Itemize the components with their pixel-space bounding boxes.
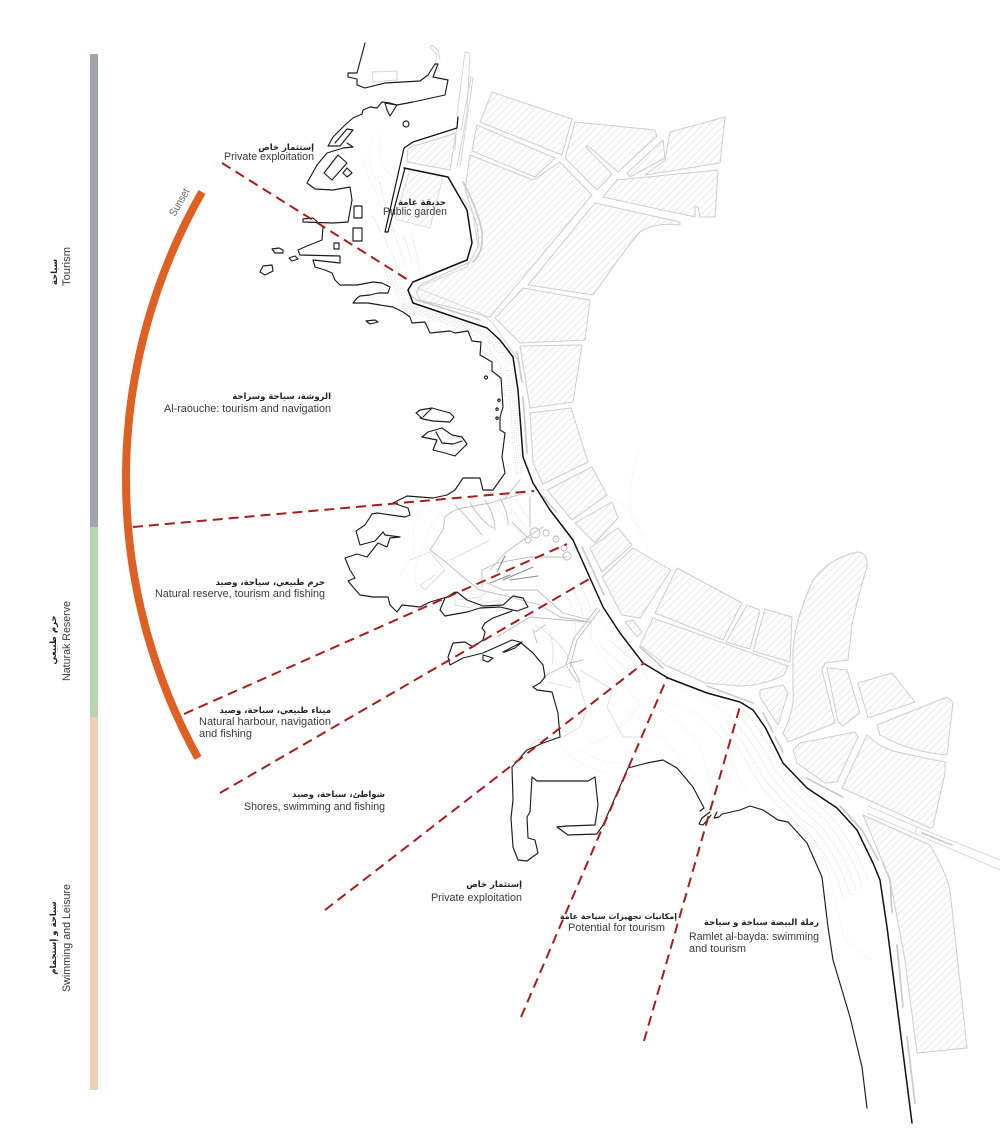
category label: Natural Reserve: [49, 601, 73, 681]
category label: Tourism: [50, 247, 73, 286]
category label: Natural Reserve: Naturak Reserve: [61, 601, 73, 681]
label: private exploitation south: إستثمار خاص: [466, 880, 522, 890]
label: Al-raouche: [164, 392, 331, 415]
label: potential for tourism: Potential for tourism: [568, 922, 665, 934]
Dalieh topographic lines: [410, 480, 640, 762]
dotted shoreline contours: [362, 135, 870, 960]
red dashed dividers: [133, 163, 741, 1041]
label: potential for tourism: [560, 912, 677, 934]
urban parcels: [395, 92, 967, 1053]
label: natural reserve: Natural reserve, tourism and fishing: [155, 588, 325, 600]
left category bar: [90, 54, 98, 1090]
category label: Swimming and Leisure: Swimming and Leisure: [61, 884, 73, 992]
label: Ramlet al-bayda: رملة البيضة سباحة و سياحة: [704, 918, 819, 928]
label: Ramlet al-bayda: Ramlet al-bayda: swimming: [689, 931, 819, 943]
sunset label: Sunset: [167, 187, 193, 218]
label: Ramlet al-bayda: [689, 918, 819, 955]
label: natural reserve: حرم طبيعي، سياحة، وصيد: [216, 578, 325, 588]
category label: Natural Reserve: حرم طبيعي: [49, 616, 59, 664]
label: public garden: [383, 198, 447, 218]
label: potential for tourism: إمكانيات تجهيزات سياحة عامة: [560, 912, 677, 921]
roads and medians: [372, 45, 1000, 1103]
label: private exploitation north: Private exploitation: [224, 151, 314, 163]
label: private exploitation north: [224, 143, 314, 163]
label: natural harbour: ميناء طبيعي، سباحة، وصيد: [219, 706, 331, 716]
label: private exploitation north: إستثمار خاص: [258, 143, 314, 153]
corniche road edge: [385, 117, 912, 1123]
label: shores: شواطئ، سباحة، وصيد: [292, 790, 385, 800]
label: Ramlet al-bayda: and tourism: [689, 943, 746, 955]
label: Al-raouche: Al-raouche: tourism and navigation: [164, 403, 331, 415]
category label: Swimming and Leisure: [49, 884, 73, 992]
label: public garden: Public garden: [383, 206, 447, 218]
label: natural harbour: and fishing: [199, 728, 252, 740]
category label: Tourism: سياحة: [50, 259, 60, 285]
label: Al-raouche: الروشة، سياحة وسراحة: [232, 392, 331, 402]
label: public garden: حديقة عامة: [398, 198, 446, 208]
shoreline: [260, 43, 867, 1108]
label: natural harbour: Natural harbour, navigation: [199, 716, 331, 728]
label: private exploitation south: [431, 880, 522, 904]
category label: Tourism: Tourism: [61, 247, 73, 286]
label: private exploitation south: Private exploitation: [431, 892, 522, 904]
label: shores: [244, 790, 385, 813]
sunset arc: [126, 192, 202, 758]
label: shores: Shores, swimming and fishing: [244, 801, 385, 813]
label: natural reserve: [155, 578, 325, 600]
category label: Swimming and Leisure: سباحة و إستجمام: [49, 901, 59, 975]
label: natural harbour: [199, 706, 331, 740]
